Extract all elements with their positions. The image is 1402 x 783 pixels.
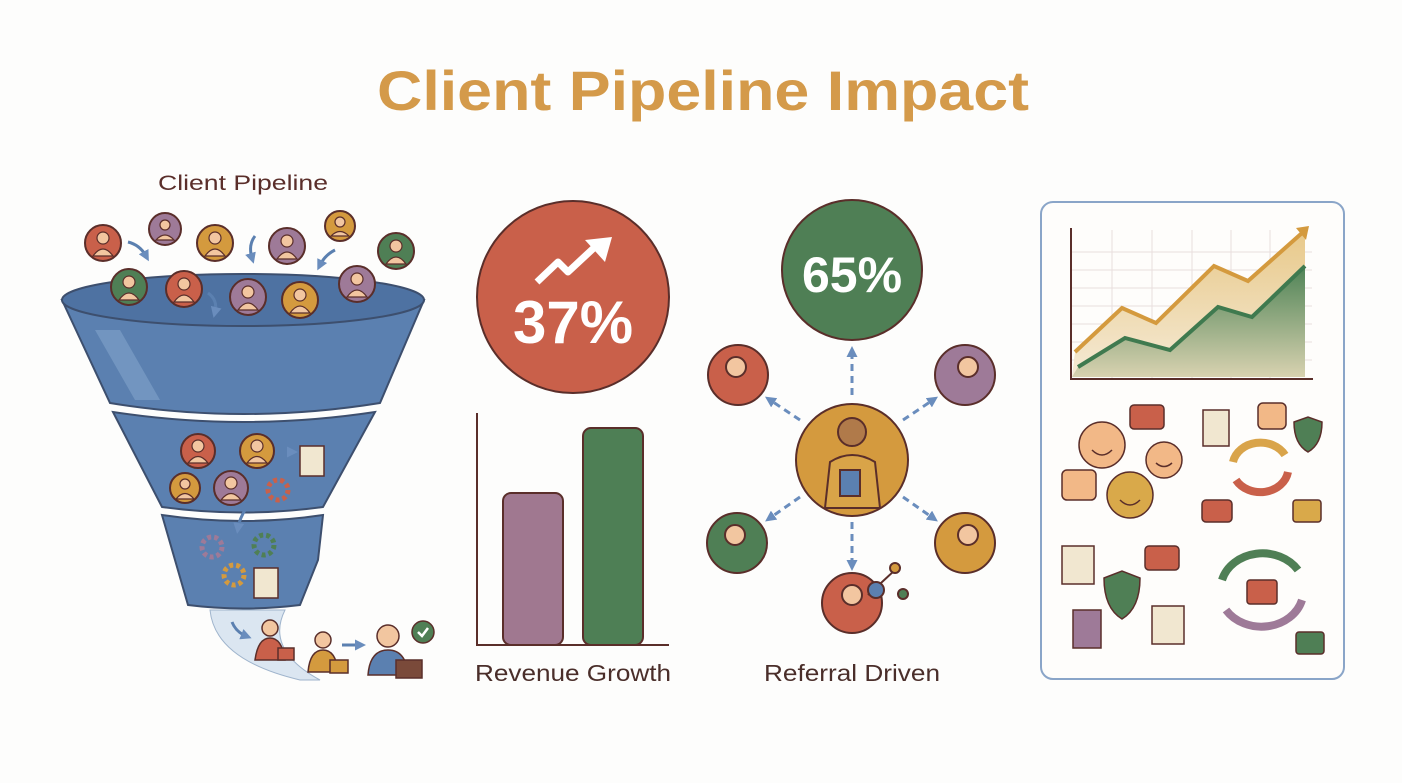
center referrer bbox=[796, 404, 908, 516]
line chart bbox=[1071, 226, 1313, 379]
icons: smileys, hearts, docs, shields, locks, cycles bbox=[1062, 403, 1324, 654]
label: Revenue Growth: Revenue Growth bbox=[475, 660, 671, 686]
stat circle 65%: 65% bbox=[802, 247, 902, 303]
referral arrows bbox=[770, 352, 933, 565]
person icons bbox=[85, 211, 414, 505]
referred people bbox=[707, 345, 995, 633]
stat circle 37% bbox=[477, 201, 669, 393]
funnel highlight bbox=[95, 330, 160, 400]
funnel arrows bbox=[128, 236, 360, 645]
icon: trend arrow bbox=[537, 245, 597, 282]
stat circle 65% bbox=[782, 200, 922, 340]
title: Client Pipeline Impact bbox=[377, 59, 1029, 122]
docs and gears bbox=[202, 446, 324, 598]
funnel bbox=[62, 274, 424, 680]
bar chart bbox=[477, 413, 669, 645]
stat circle 37%: 37% bbox=[513, 289, 633, 356]
heading: Client Pipeline: Client Pipeline bbox=[158, 172, 328, 195]
panel: referral driven bbox=[707, 200, 995, 686]
panel: client pipeline funnel bbox=[62, 172, 434, 680]
panel: revenue growth bbox=[475, 201, 671, 686]
panel: growth and loyalty bbox=[1041, 202, 1344, 679]
converted clients bbox=[255, 620, 434, 678]
label: Referral Driven: Referral Driven bbox=[764, 660, 940, 686]
